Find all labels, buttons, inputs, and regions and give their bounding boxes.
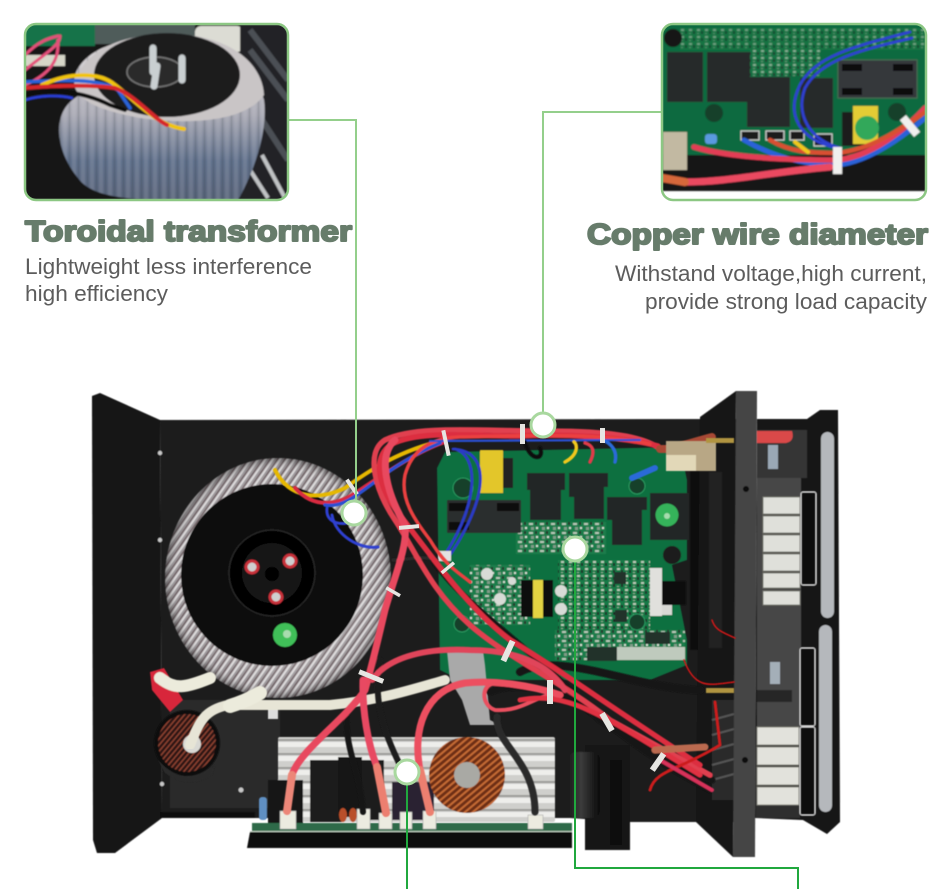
transformer blue leads (325, 443, 440, 505)
inverter chassis (92, 391, 840, 857)
right section behind front plate (755, 410, 840, 834)
leader line: copper wire (543, 112, 662, 415)
transformer red lead (295, 442, 445, 503)
vent slots (821, 432, 834, 618)
short relay loops (565, 442, 576, 462)
buzzer (663, 546, 681, 564)
inset photo: copper wire (662, 24, 926, 200)
toroidal transformer (165, 458, 391, 698)
smt areas (516, 522, 606, 554)
main top harness (374, 430, 710, 775)
front plate flange (696, 391, 736, 857)
copper toroid (429, 737, 505, 813)
heading: copper wire diameter: Copper wire diameter (587, 219, 928, 251)
description: toroidal transformer (25, 254, 312, 306)
screw mounts (705, 104, 723, 122)
leader line: control board (575, 555, 798, 889)
blue terminal (705, 134, 717, 144)
yellow capacitor (842, 112, 864, 147)
blue wires on board (450, 449, 480, 555)
top rim of windings (74, 34, 264, 121)
smt components (680, 28, 925, 50)
yellow capacitor (480, 450, 503, 493)
dark fins at right (240, 24, 288, 200)
heat sink with components (247, 737, 572, 848)
description: toroidal transformer: high efficiency (25, 281, 168, 306)
black disc (94, 33, 240, 117)
black relay leads (525, 442, 541, 457)
spade terminals (280, 809, 543, 829)
screw mounts (453, 478, 645, 632)
centre bolt (770, 662, 780, 684)
relays (667, 52, 833, 128)
lower left fan (585, 745, 630, 850)
cable ties (345, 424, 666, 772)
white sleeves at top (195, 26, 243, 52)
dark capacitors (268, 780, 303, 824)
front plate (733, 391, 757, 857)
wires (794, 32, 910, 148)
leader line: heat sink (406, 780, 408, 889)
main control board (437, 447, 689, 680)
marker dot: copper wire (531, 413, 555, 437)
green sticker (273, 623, 297, 647)
terminal plate (757, 478, 801, 728)
marker dot: control board (563, 537, 587, 561)
terminal label strips (801, 492, 816, 585)
sticker on relay (656, 504, 678, 526)
cable ties (833, 147, 842, 174)
wiring harness (275, 430, 735, 813)
resistor (259, 797, 267, 820)
leader line: transformer (288, 120, 356, 505)
down wire to heat sink (292, 440, 405, 775)
electrolytic capacitors (481, 568, 567, 615)
terminal pads (741, 131, 832, 146)
red ring terminal and white sleeves (150, 668, 445, 745)
lower left inductor (154, 710, 220, 782)
back panel (160, 419, 740, 822)
mounting holes (158, 451, 244, 792)
red busbar cover (757, 431, 793, 443)
studs (153, 48, 182, 86)
relay block (838, 60, 917, 98)
copper lug and bracket (666, 438, 734, 693)
marker dot: heat sink (395, 760, 419, 784)
transformer yellow lead (275, 440, 445, 495)
description: copper wire diameter (615, 261, 927, 314)
black bottom panel (662, 155, 926, 191)
lower right red wires (650, 702, 720, 790)
power transformer (521, 580, 553, 617)
ribbon cable (447, 650, 500, 725)
black base (247, 832, 572, 848)
orange capacitors (339, 808, 347, 822)
connector (663, 132, 687, 170)
marker dot: transformer (342, 501, 366, 525)
lower board (252, 823, 572, 833)
description: toroidal transformer: Lightweight less interference (25, 254, 312, 279)
bolts (246, 555, 296, 603)
description: copper wire diameter: provide strong load capacity (645, 289, 927, 314)
black wires (347, 717, 363, 812)
inset photo: toroidal transformer (25, 24, 288, 200)
relays (527, 473, 689, 545)
buzzer (664, 29, 682, 47)
wrapped transformer body (59, 45, 265, 200)
left flange (92, 393, 162, 853)
wires (25, 36, 60, 85)
lower terminal blocks (757, 727, 799, 805)
black disc (181, 484, 363, 666)
fan beside the board (690, 470, 736, 650)
windings (165, 458, 391, 698)
description: copper wire diameter: Withstand voltage,high current, (615, 261, 927, 286)
black chips (587, 572, 670, 661)
right end of harness into copper lug (660, 437, 712, 449)
light connector strip (617, 647, 685, 660)
upper terminal blocks (763, 497, 800, 605)
relay block (447, 500, 521, 533)
green board corner (25, 24, 95, 46)
heading: toroidal transformer: Toroidal transformer (25, 216, 352, 248)
